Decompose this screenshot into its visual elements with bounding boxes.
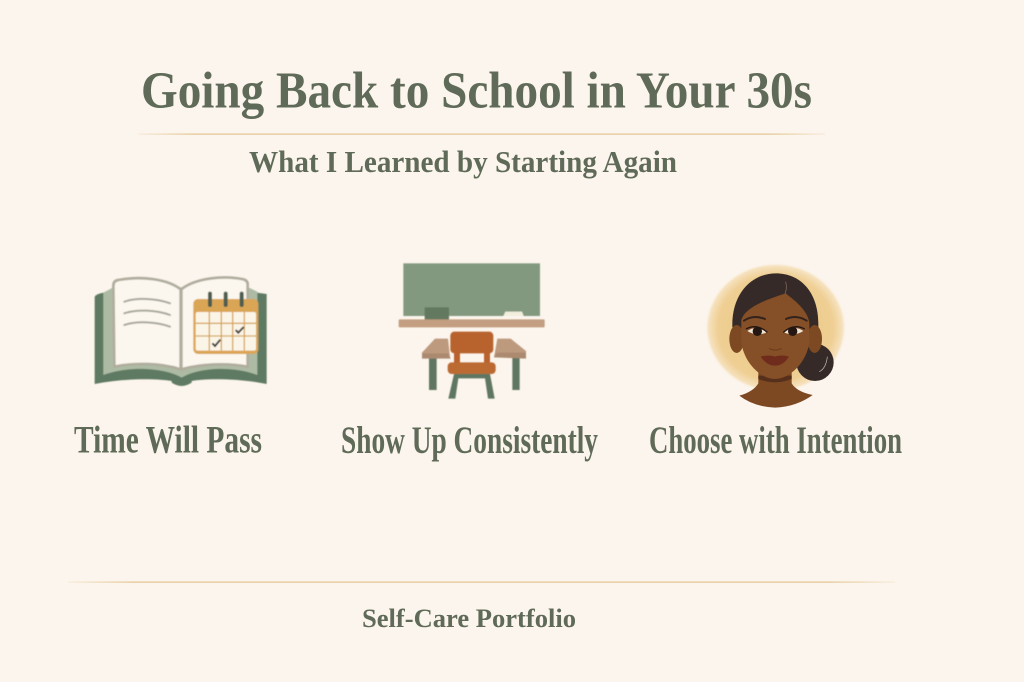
book cover	[95, 293, 267, 386]
label: Time Will Pass: Time Will Pass	[74, 418, 262, 462]
label: Choose with Intention: Choose with Intention	[649, 419, 902, 462]
right page	[181, 277, 248, 369]
chair	[448, 332, 496, 399]
page stack	[103, 287, 257, 378]
calendar	[193, 292, 258, 354]
icon: woman portrait with halo	[705, 263, 846, 408]
desk	[422, 339, 526, 390]
eraser	[425, 307, 449, 320]
face	[741, 293, 809, 379]
chalk	[503, 312, 524, 316]
label: Show Up Consistently: Show Up Consistently	[341, 419, 598, 462]
lips	[761, 355, 789, 366]
halo	[705, 263, 846, 393]
subtitle: What I Learned by Starting Again	[249, 144, 677, 179]
icon: open book with calendar	[95, 277, 267, 386]
eyebrows	[744, 317, 807, 321]
neck and shoulders	[739, 372, 813, 408]
ears	[729, 325, 744, 353]
tray	[399, 319, 545, 327]
text lines	[124, 299, 170, 327]
title: Going Back to School in Your 30s	[141, 62, 812, 120]
footer: Self-Care Portfolio	[362, 604, 576, 633]
icon: chalkboard and desk	[399, 263, 545, 399]
hair	[732, 273, 818, 345]
hair bun	[796, 344, 834, 381]
eyes	[746, 327, 805, 336]
left page	[113, 278, 181, 369]
chalkboard	[403, 263, 540, 316]
nose	[769, 348, 782, 350]
